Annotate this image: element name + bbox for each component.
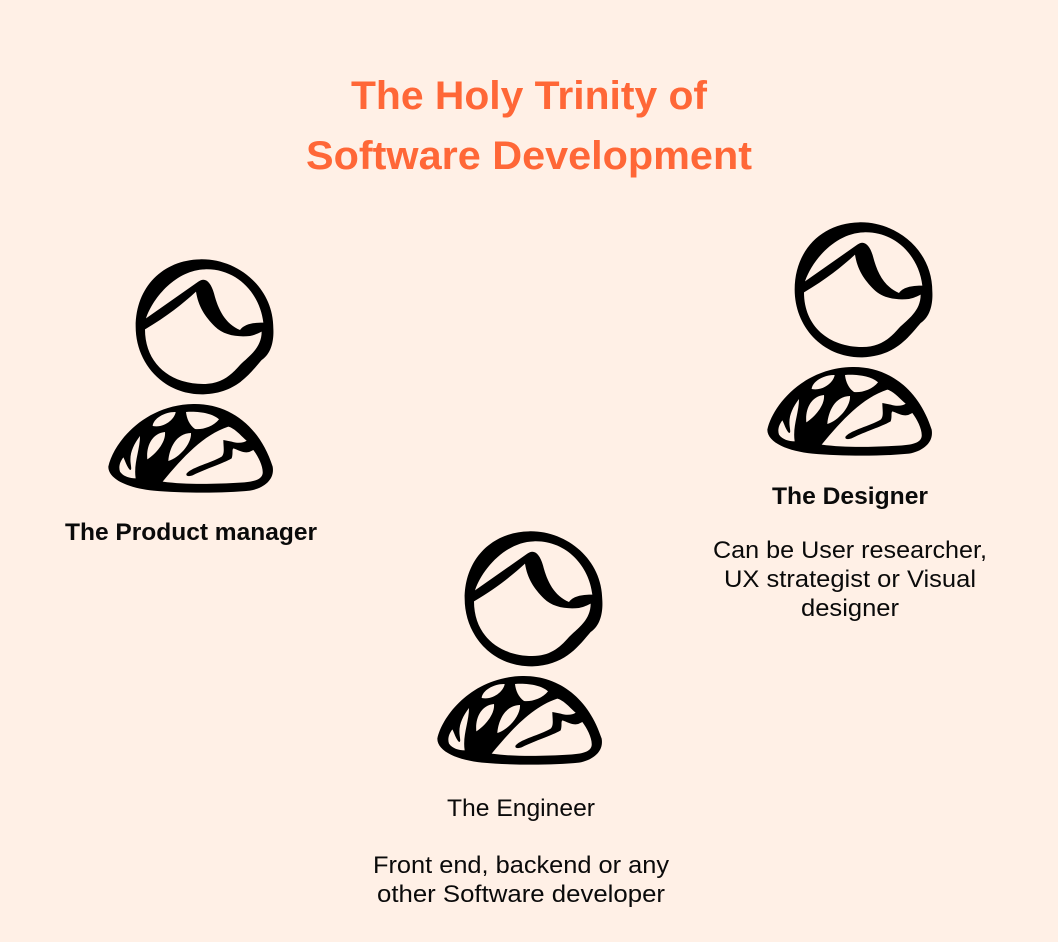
icon: product manager person: [108, 259, 273, 493]
text: engineer description: [373, 852, 669, 908]
label: the product manager: The Product manager: [65, 519, 317, 546]
text: designer description: UX strategist or Visual: [724, 566, 976, 593]
text: designer description: Can be User researcher,: [713, 537, 987, 564]
title: The Holy Trinity of: [351, 74, 708, 118]
text: engineer description: other Software developer: [377, 881, 665, 908]
title: [306, 74, 752, 178]
text: designer description: designer: [801, 595, 899, 622]
text: engineer description: Front end, backend or any: [373, 852, 669, 879]
text: designer description: [713, 537, 987, 622]
icon: engineer person: [437, 531, 602, 765]
title: Software Development: [306, 134, 752, 178]
label: the designer: The Designer: [772, 483, 928, 510]
label: the engineer: The Engineer: [447, 795, 595, 822]
icon: designer person: [767, 222, 932, 456]
